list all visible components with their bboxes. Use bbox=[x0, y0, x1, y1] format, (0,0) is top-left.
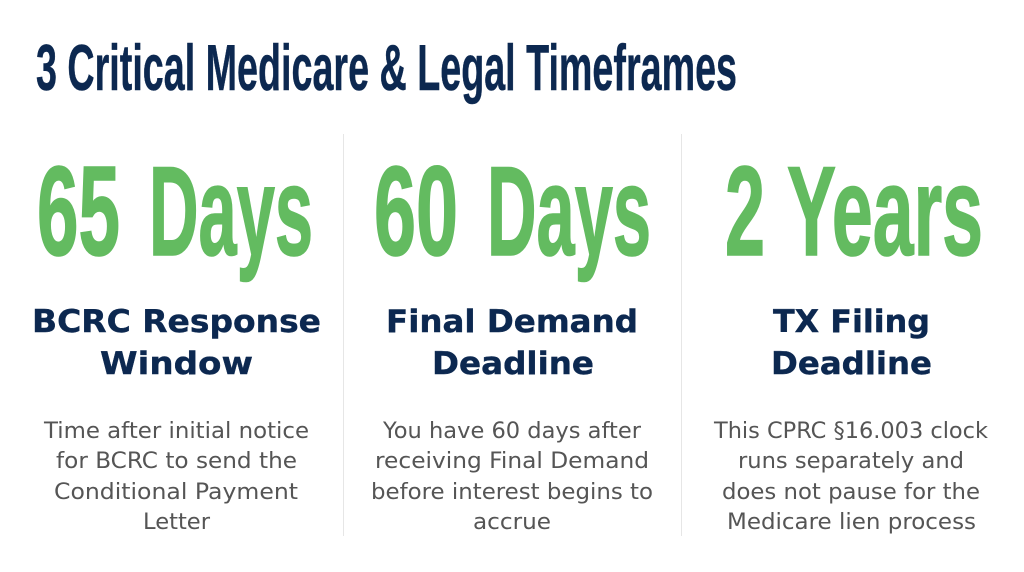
big number: 65 Days: Days bbox=[149, 140, 313, 282]
heading: Final Demand Deadline: Final Demand bbox=[386, 304, 638, 340]
description: BCRC response: Conditional Payment bbox=[54, 479, 298, 505]
heading: BCRC Response Window: Window bbox=[100, 346, 253, 382]
description: TX filing: This CPRC §16.003 clock bbox=[713, 418, 988, 444]
heading: Final Demand Deadline bbox=[386, 304, 638, 382]
panel: 2 years bbox=[713, 140, 988, 535]
description: TX filing: runs separately and bbox=[738, 448, 964, 474]
heading: BCRC Response Window bbox=[32, 304, 321, 382]
big number: 2 Years bbox=[725, 140, 983, 282]
panel: 60 days bbox=[371, 140, 653, 535]
description: final demand: before interest begins to bbox=[371, 479, 653, 505]
description: TX filing: does not pause for the bbox=[722, 479, 980, 505]
description: BCRC response: Letter bbox=[143, 509, 211, 535]
description: TX filing bbox=[713, 418, 988, 535]
description: final demand: receiving Final Demand bbox=[375, 448, 649, 474]
big number: 60 Days: 60 bbox=[374, 140, 458, 282]
description: BCRC response bbox=[43, 418, 309, 535]
big number: 60 Days: Days bbox=[487, 140, 651, 282]
big number: 65 Days bbox=[37, 140, 313, 282]
description: TX filing: Medicare lien process bbox=[727, 509, 976, 535]
big number: 2 Years: 2 bbox=[725, 140, 765, 282]
description: final demand: accrue bbox=[473, 509, 551, 535]
description: final demand bbox=[371, 418, 653, 535]
heading: Final Demand Deadline: Deadline bbox=[432, 346, 594, 382]
heading: TX Filing Deadline: Deadline bbox=[771, 346, 932, 382]
description: final demand: You have 60 days after bbox=[382, 418, 642, 444]
description: BCRC response: Time after initial notice bbox=[43, 418, 309, 444]
big number: 65 Days: 65 bbox=[37, 140, 120, 282]
description: BCRC response: for BCRC to send the bbox=[56, 448, 297, 474]
panel: 65 days bbox=[32, 140, 321, 535]
heading: TX Filing Deadline bbox=[771, 304, 932, 382]
big number: 60 Days bbox=[374, 140, 651, 282]
heading: TX Filing Deadline: TX Filing bbox=[773, 304, 930, 340]
heading: BCRC Response Window: BCRC Response bbox=[32, 304, 321, 340]
